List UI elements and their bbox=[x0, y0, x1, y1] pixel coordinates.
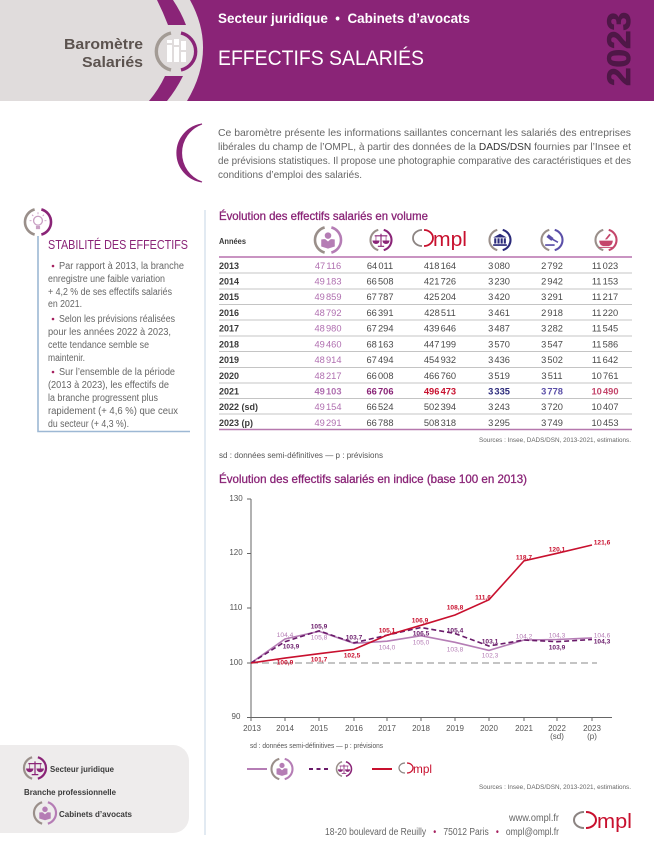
row 2022: 2022 (sd) bbox=[219, 402, 258, 412]
row 2020: 3 519 bbox=[488, 371, 510, 381]
row 2014: 421 726 bbox=[424, 276, 456, 286]
footer contact: 18-20 boulevard de Reuilly • 75012 Paris • ompl@ompl.fr bbox=[325, 826, 559, 838]
row 2013: 418 164 bbox=[424, 261, 456, 271]
y axis labels: 90 bbox=[232, 712, 241, 721]
row 2013: 2 792 bbox=[541, 261, 563, 271]
row 2021 highlighted: 3 335 bbox=[488, 386, 510, 396]
row 2013 bbox=[219, 261, 618, 271]
label: branche professionnelle: Branche professionnelle bbox=[24, 787, 116, 797]
row 2022: 49 154 bbox=[314, 402, 342, 412]
sidebar bullet 3: Sur l’ensemble de la période bbox=[59, 367, 175, 378]
x axis labels: 2018 bbox=[412, 724, 430, 733]
footer contact bbox=[325, 812, 559, 838]
x axis labels: 2019 bbox=[446, 724, 464, 733]
legend icon: secteur juridique bbox=[336, 762, 352, 776]
sidebar bullet 3: du secteur (+ 4,3 %). bbox=[48, 419, 129, 430]
row 2019: 3 436 bbox=[488, 355, 510, 365]
row 2022: 3 243 bbox=[488, 402, 510, 412]
footer logo: Ompl bbox=[574, 811, 632, 833]
row 2017: 48 980 bbox=[314, 324, 342, 334]
labels: cabinets d'avocats: 104,6 bbox=[594, 632, 611, 640]
row 2017: 3 282 bbox=[541, 324, 563, 334]
table source: Sources : Insee, DADS/DSN, 2013-2021, estimations. bbox=[479, 437, 631, 444]
x axis labels: 2013 bbox=[243, 724, 261, 733]
row 2016 bbox=[219, 308, 618, 318]
labels: Ompl: 100,9 bbox=[277, 660, 294, 666]
row 2016: 3 461 bbox=[488, 308, 510, 318]
labels: secteur juridique: 105,4 bbox=[447, 628, 464, 634]
row 2013: 3 080 bbox=[488, 261, 510, 271]
labels: Ompl: 102,5 bbox=[344, 652, 361, 660]
row 2014: 2 942 bbox=[541, 276, 563, 286]
row 2023: 49 291 bbox=[314, 418, 342, 428]
line chart: indice base 100 bbox=[229, 494, 612, 741]
row 2013: 64 011 bbox=[367, 261, 393, 271]
row 2015: 67 787 bbox=[366, 292, 394, 302]
x axis labels: 2015 bbox=[310, 724, 328, 733]
legend logo: Ompl: mpl bbox=[413, 762, 432, 776]
row 2018 bbox=[219, 340, 618, 350]
row 2017: 2017 bbox=[219, 324, 239, 334]
row 2019: 11 642 bbox=[592, 355, 618, 365]
intro paragraph bbox=[218, 128, 631, 181]
sidebar bullet 3: (2013 à 2023), les effectifs de bbox=[48, 380, 169, 391]
sidebar bullet 3: rapidement (+ 4,6 %) que ceux bbox=[48, 406, 178, 417]
row 2022: 10 407 bbox=[591, 402, 619, 412]
x axis labels: 2020 bbox=[480, 724, 498, 733]
labels: Ompl: 111,6 bbox=[475, 594, 491, 602]
chart heading: Évolution des effectifs salariés en indice (base 100 en 2013) bbox=[219, 471, 527, 486]
icon: secteur juridique bbox=[24, 757, 46, 779]
labels: cabinets d'avocats: 105,0 bbox=[413, 640, 430, 646]
row 2014: 11 153 bbox=[592, 276, 618, 286]
row 2019: 3 502 bbox=[541, 355, 563, 365]
row 2021 highlighted: 496 473 bbox=[424, 386, 456, 396]
icon: gavel bbox=[541, 230, 563, 250]
sidebar panel: stabilité des effectifs bbox=[25, 209, 190, 432]
row 2016: 428 511 bbox=[424, 308, 456, 318]
labels: secteur juridique: 103,9 bbox=[549, 644, 566, 652]
legend logo: Ompl bbox=[399, 762, 432, 776]
row 2017: 3 487 bbox=[488, 324, 510, 334]
row 2020: 10 761 bbox=[591, 371, 619, 381]
row 2016: 2016 bbox=[219, 308, 239, 318]
row 2023: 3 295 bbox=[488, 418, 510, 428]
labels: cabinets d'avocats: 104,0 bbox=[379, 644, 396, 652]
sidebar bullet 3 bbox=[48, 367, 178, 430]
footer logo: Ompl: mpl bbox=[597, 811, 632, 833]
row 2019: 48 914 bbox=[314, 355, 342, 365]
x axis labels bbox=[243, 724, 601, 741]
row 2013: 2013 bbox=[219, 261, 239, 271]
row 2015: 3 291 bbox=[541, 292, 563, 302]
x axis labels: 2016 bbox=[345, 724, 363, 733]
row 2016: 11 220 bbox=[592, 308, 618, 318]
row 2018: 447 199 bbox=[424, 340, 456, 350]
labels: cabinets d'avocats: 103,8 bbox=[447, 646, 464, 654]
table note: sd : données semi-définitives — p : prévisions bbox=[219, 450, 383, 460]
labels: Ompl: 105,1 bbox=[379, 628, 396, 634]
row 2018: 3 547 bbox=[541, 340, 563, 350]
row 2021 highlighted: 10 490 bbox=[591, 386, 619, 396]
labels: cabinets d'avocats bbox=[277, 632, 611, 660]
x axis labels: 2017 bbox=[378, 724, 396, 733]
row 2017: 439 646 bbox=[424, 324, 456, 334]
intro paragraph: de prévisions statistiques. Il propose une photographie comparative des caractéristiques et des bbox=[218, 156, 631, 167]
barometer label: Salariés bbox=[82, 54, 143, 71]
sidebar bullet 3: la branche progressent plus bbox=[48, 393, 158, 404]
row 2021 highlighted: 49 103 bbox=[314, 386, 342, 396]
x axis labels: (p) bbox=[587, 732, 597, 741]
row 2018: 49 460 bbox=[314, 340, 342, 350]
sidebar bullet 1: Par rapport à 2013, la branche bbox=[59, 261, 184, 272]
row 2016: 66 391 bbox=[366, 308, 394, 318]
chart note: sd : données semi-définitives — p : prévisions bbox=[250, 741, 383, 750]
icon: mortar bbox=[595, 230, 617, 250]
labels: Ompl bbox=[277, 540, 611, 666]
row 2015: 425 204 bbox=[424, 292, 456, 302]
intro bracket bbox=[177, 124, 202, 182]
labels: Ompl: 108,8 bbox=[447, 604, 464, 612]
sidebar bullet 2 bbox=[48, 314, 175, 364]
row 2015: 3 420 bbox=[488, 292, 510, 302]
header band bbox=[0, 0, 654, 101]
labels: secteur juridique bbox=[283, 624, 611, 652]
labels: Ompl: 121,6 bbox=[594, 540, 611, 546]
y axis labels: 130 bbox=[229, 494, 243, 503]
panel: branche professionnelle bbox=[0, 745, 189, 833]
x axis labels: 2022 bbox=[548, 724, 566, 733]
labels: secteur juridique: 103,7 bbox=[346, 634, 363, 642]
row 2018: 11 586 bbox=[592, 340, 618, 350]
row 2023: 10 453 bbox=[591, 418, 619, 428]
header top arc bbox=[157, 0, 186, 25]
row 2021 highlighted: 3 778 bbox=[541, 386, 563, 396]
sidebar bullet 2: pour les années 2022 à 2023, bbox=[48, 327, 171, 338]
main title: EFFECTIFS SALARIÉS bbox=[218, 47, 424, 70]
labels: cabinets d'avocats: 104,4 bbox=[277, 632, 294, 639]
labels: cabinets d'avocats: 105,8 bbox=[311, 634, 328, 642]
sidebar heading: STABILITÉ DES EFFECTIFS bbox=[48, 237, 188, 252]
sidebar bullet 1: enregistre une faible variation bbox=[48, 274, 165, 285]
labels: secteur juridique: 103,9 bbox=[283, 644, 300, 650]
intro paragraph: Ce baromètre présente les informations saillantes concernant les salariés des entreprises bbox=[218, 128, 631, 139]
x axis labels: 2014 bbox=[276, 724, 294, 733]
sector subtitle: Secteur juridique • Cabinets d’avocats bbox=[218, 11, 470, 26]
x axis labels: 2023 bbox=[583, 724, 601, 733]
labels: secteur juridique: 105,9 bbox=[311, 624, 328, 630]
row 2016: 48 792 bbox=[314, 308, 342, 318]
label: secteur juridique: Secteur juridique bbox=[50, 764, 114, 774]
row 2013: 47 116 bbox=[315, 261, 341, 271]
row 2018: 68 163 bbox=[366, 340, 394, 350]
labels: cabinets d'avocats: 102,3 bbox=[482, 652, 499, 660]
row 2021 highlighted: 2021 bbox=[219, 386, 239, 396]
row 2022: 66 524 bbox=[366, 402, 394, 412]
icon: bank bbox=[489, 230, 511, 250]
row 2021 highlighted: 66 706 bbox=[366, 386, 394, 396]
row 2022 bbox=[219, 402, 619, 412]
table: effectifs en volume bbox=[219, 227, 632, 430]
x axis labels: (sd) bbox=[550, 732, 564, 741]
row 2023: 508 318 bbox=[424, 418, 456, 428]
labels: Ompl: 106,9 bbox=[412, 618, 429, 624]
label: cabinets d'avocats: Cabinets d’avocats bbox=[59, 809, 132, 819]
table header row bbox=[219, 227, 617, 253]
legend icon: cabinets d'avocats bbox=[271, 759, 293, 779]
row 2020: 2020 bbox=[219, 371, 239, 381]
row 2022: 502 394 bbox=[424, 402, 456, 412]
icon: cabinets d'avocats bbox=[34, 802, 56, 824]
barometer label: Baromètre bbox=[64, 36, 143, 53]
row 2014 bbox=[219, 276, 618, 286]
labels: cabinets d'avocats: 104,2 bbox=[516, 634, 533, 640]
row 2019: 67 494 bbox=[366, 355, 394, 365]
header bottom arc bbox=[149, 76, 183, 101]
row 2023 bbox=[219, 418, 619, 428]
row 2014: 3 230 bbox=[488, 276, 510, 286]
row 2018: 2018 bbox=[219, 340, 239, 350]
icon: cabinets d'avocats bbox=[315, 227, 341, 253]
icon: secteur juridique bbox=[370, 230, 392, 250]
sidebar bullet 1: en 2021. bbox=[48, 299, 82, 310]
row 2015 bbox=[219, 292, 618, 302]
series: cabinets d'avocats bbox=[251, 631, 592, 663]
footer contact: www.ompl.fr bbox=[508, 812, 559, 824]
sidebar bullet 2: Selon les prévisions réalisées bbox=[59, 314, 175, 325]
row 2014: 66 508 bbox=[366, 276, 394, 286]
row 2015: 2015 bbox=[219, 292, 239, 302]
sidebar bullet 1: + 4,2 % de ses effectifs salariés bbox=[48, 287, 172, 298]
chart source: Sources : Insee, DADS/DSN, 2013-2021, estimations. bbox=[479, 784, 631, 791]
row 2020: 466 760 bbox=[424, 371, 456, 381]
table heading: Évolution des effectifs salariés en volume bbox=[219, 208, 428, 223]
row 2020: 48 217 bbox=[314, 371, 342, 381]
intro paragraph: libérales du champ de l’OMPL, à partir des données de la DADS/DSN fournies par l’Insee et bbox=[218, 142, 631, 153]
row 2021 highlighted bbox=[219, 386, 619, 396]
y axis labels: 120 bbox=[229, 548, 243, 557]
labels: secteur juridique: 106,5 bbox=[413, 630, 430, 638]
row 2014: 49 183 bbox=[314, 276, 342, 286]
header grey panel bbox=[0, 0, 203, 101]
chart axes bbox=[247, 499, 612, 721]
year: 2023 bbox=[601, 12, 637, 86]
labels: secteur juridique: 103,1 bbox=[482, 638, 499, 646]
series: secteur juridique bbox=[251, 628, 592, 663]
table header row: Années bbox=[219, 237, 247, 246]
row 2020: 66 008 bbox=[366, 371, 394, 381]
row 2023: 3 749 bbox=[541, 418, 563, 428]
row 2016: 2 918 bbox=[541, 308, 563, 318]
header icon: barometer sliders bbox=[156, 33, 196, 70]
labels: Ompl: 120,1 bbox=[549, 546, 566, 554]
sidebar bullet 2: cette tendance semble se bbox=[48, 340, 149, 351]
row 2017: 67 294 bbox=[366, 324, 394, 334]
row 2019: 2019 bbox=[219, 355, 239, 365]
row 2017: 11 545 bbox=[592, 324, 618, 334]
labels: Ompl: 101,7 bbox=[311, 656, 328, 664]
row 2019 bbox=[219, 355, 618, 365]
row 2023: 66 788 bbox=[366, 418, 394, 428]
logo: Ompl: mpl bbox=[433, 229, 467, 251]
labels: cabinets d'avocats: 104,3 bbox=[549, 632, 566, 640]
row 2018: 3 570 bbox=[488, 340, 510, 350]
y axis labels bbox=[229, 494, 243, 721]
row 2015: 11 217 bbox=[592, 292, 618, 302]
row 2020: 3 511 bbox=[541, 371, 563, 381]
sidebar bullet 1 bbox=[48, 261, 184, 310]
labels: Ompl: 118,7 bbox=[516, 554, 532, 562]
y axis labels: 110 bbox=[230, 603, 243, 612]
intro paragraph: conditions d’emploi des salariés. bbox=[218, 170, 362, 181]
row 2014: 2014 bbox=[219, 276, 239, 286]
x axis labels: 2021 bbox=[515, 724, 533, 733]
row 2022: 3 720 bbox=[541, 402, 563, 412]
y axis labels: 100 bbox=[229, 658, 243, 667]
logo: Ompl bbox=[413, 229, 467, 251]
series: Ompl bbox=[251, 545, 592, 663]
row 2013: 11 023 bbox=[592, 261, 618, 271]
icon: light bulb bbox=[25, 209, 51, 235]
barometer label bbox=[64, 36, 143, 71]
chart legend bbox=[247, 759, 432, 779]
labels: secteur juridique: 104,3 bbox=[594, 638, 611, 646]
row 2019: 454 932 bbox=[424, 355, 456, 365]
row 2023: 2023 (p) bbox=[219, 418, 253, 428]
row 2020 bbox=[219, 371, 619, 381]
row 2017 bbox=[219, 324, 618, 334]
sidebar bullet 2: maintenir. bbox=[48, 353, 85, 364]
row 2015: 49 859 bbox=[314, 292, 342, 302]
